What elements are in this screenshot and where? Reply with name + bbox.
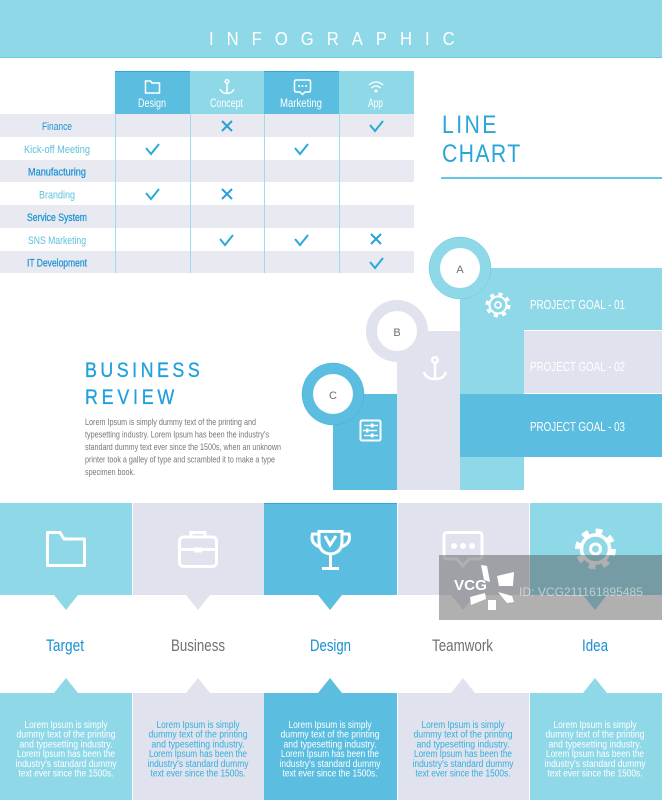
icon: gear: [487, 294, 509, 316]
table header: Concept: Concept: [210, 96, 243, 110]
panel: project goal 02: PROJECT GOAL - 02: [530, 359, 625, 374]
row labels: [24, 121, 90, 270]
panel: step A with project goal 01: PROJECT GOAL - 01: [530, 297, 625, 312]
panel: Business description: Lorem Ipsum has been the: [149, 749, 247, 760]
panel: Target description: industry's standard dummy: [16, 759, 116, 770]
panel: project goal 02: [524, 331, 662, 393]
label: Design: Design: [310, 637, 351, 655]
table header: Design: [115, 71, 190, 114]
panel: step A with project goal 01: [429, 237, 662, 490]
text block: business review body: Lorem Ipsum is simply dummy text of the printing and: [85, 417, 256, 427]
panel: Teamwork description: Lorem Ipsum is simply: [422, 720, 504, 731]
heading: business review: BUSINESS: [85, 359, 200, 382]
heading: line chart: LINE: [442, 110, 496, 138]
row labels: Kick-off Meeting: [24, 144, 90, 156]
row labels: IT Development: [27, 258, 87, 270]
title: INFOGRAPHIC: [209, 28, 455, 49]
panel: Business description: [133, 678, 264, 800]
panel: Design description: [264, 678, 397, 800]
row labels: Service System: [27, 212, 87, 224]
icon: trophy: [312, 532, 350, 568]
icon: chat bubble: [444, 532, 482, 566]
panel: Idea description: industry's standard dummy: [544, 759, 646, 770]
panel: Target description: text ever since the 1500s.: [18, 768, 114, 780]
icon: folder: [48, 532, 84, 566]
panel: Idea description: dummy text of the printing: [546, 730, 644, 740]
table header: App: [339, 71, 414, 114]
table header: App: App: [368, 96, 383, 110]
panel: Business description: industry's standard dummy: [148, 759, 248, 770]
table header: Design: Design: [138, 96, 166, 110]
table header: Concept: [190, 71, 264, 114]
row labels: Finance: [42, 121, 72, 133]
panel: Idea description: Lorem Ipsum has been the: [546, 749, 644, 760]
panel: Target top: [0, 503, 132, 610]
label: Teamwork: Teamwork: [432, 637, 494, 655]
check marks: [146, 121, 383, 268]
panel: step B: [366, 300, 460, 490]
row labels: Manufacturing: [28, 166, 86, 178]
panel: project goal 03: [460, 394, 662, 457]
panel: step C: C: [329, 390, 337, 402]
panel: Target description: [0, 678, 132, 800]
panel: Teamwork description: dummy text of the printing: [414, 730, 512, 740]
icon: sliders: [360, 420, 380, 440]
panel: Design description: dummy text of the printing: [280, 730, 380, 740]
watermark: VCG: [454, 578, 487, 594]
panel: Target description: and typesetting industry.: [20, 740, 112, 750]
text block: business review body: typesetting industry. Lorem Ipsum has been the industry's: [85, 430, 269, 440]
panel: step B: B: [393, 327, 401, 339]
header band: [0, 0, 662, 58]
panel: Target description: Lorem Ipsum has been the: [17, 749, 115, 760]
panel: Design description: and typesetting industry.: [284, 740, 376, 750]
text block: business review body: [85, 417, 281, 477]
panel: Teamwork description: Lorem Ipsum has been the: [414, 749, 512, 760]
panel: Design description: Lorem Ipsum is simply: [288, 720, 372, 731]
table header: Marketing: Marketing: [280, 96, 322, 110]
panel: Idea description: [530, 678, 662, 800]
text block: business review body: printer took a galley of type and scrambled it to make a type: [85, 454, 275, 464]
panel: Target description: Lorem Ipsum is simply: [24, 720, 108, 731]
panel: Business description: dummy text of the printing: [148, 730, 248, 740]
heading: line chart: CHART: [442, 139, 520, 167]
panel: Teamwork description: and typesetting industry.: [416, 740, 510, 750]
panel: Business description: Lorem Ipsum is simply: [156, 720, 240, 731]
panel: Design description: Lorem Ipsum has been the: [281, 749, 379, 760]
panel: step C: [302, 363, 397, 490]
panel: Idea description: text ever since the 1500s.: [548, 768, 642, 780]
icon: briefcase: [180, 532, 216, 566]
panel: Design description: industry's standard dummy: [280, 759, 380, 770]
watermark: [439, 555, 662, 620]
text block: business review body: standard dummy text ever since the 1500s, when an unknown: [85, 442, 281, 452]
panel: Idea description: and typesetting industry.: [548, 740, 642, 750]
text block: business review body: specimen book.: [85, 467, 135, 477]
label: Target: Target: [46, 637, 84, 655]
table header: Marketing: [264, 71, 339, 114]
watermark: ID: VCG211161895485: [519, 585, 643, 599]
row labels: SNS Marketing: [28, 235, 86, 247]
panel: Business top: [133, 503, 264, 610]
panel: Business description: and typesetting industry.: [152, 740, 244, 750]
panel: Teamwork description: industry's standard dummy: [412, 759, 514, 770]
panel: project goal 03: PROJECT GOAL - 03: [530, 419, 625, 434]
panel: Idea description: Lorem Ipsum is simply: [554, 720, 636, 731]
panel: Teamwork top: [398, 503, 529, 610]
heading: line chart: [441, 110, 662, 179]
panel: Idea top: [530, 503, 662, 610]
panel: step A with project goal 01: A: [456, 264, 464, 276]
heading: business review: REVIEW: [85, 386, 175, 409]
cross marks: [222, 121, 381, 244]
panel: Teamwork description: text ever since the 1500s.: [416, 768, 510, 780]
panel: Teamwork description: [398, 678, 529, 800]
icon: anchor: [424, 357, 446, 379]
panel: Design top: [264, 503, 397, 610]
panel: Business description: text ever since the 1500s.: [150, 768, 246, 780]
label: Idea: Idea: [582, 637, 609, 655]
heading: business review: [85, 359, 200, 409]
panel: Design description: text ever since the 1500s.: [282, 768, 378, 780]
row labels: Branding: [39, 190, 75, 202]
panel: comparison table: [0, 71, 414, 273]
panel: Target description: dummy text of the printing: [16, 730, 116, 740]
label: Business: Business: [171, 637, 225, 655]
icon: large gear: [578, 531, 614, 567]
